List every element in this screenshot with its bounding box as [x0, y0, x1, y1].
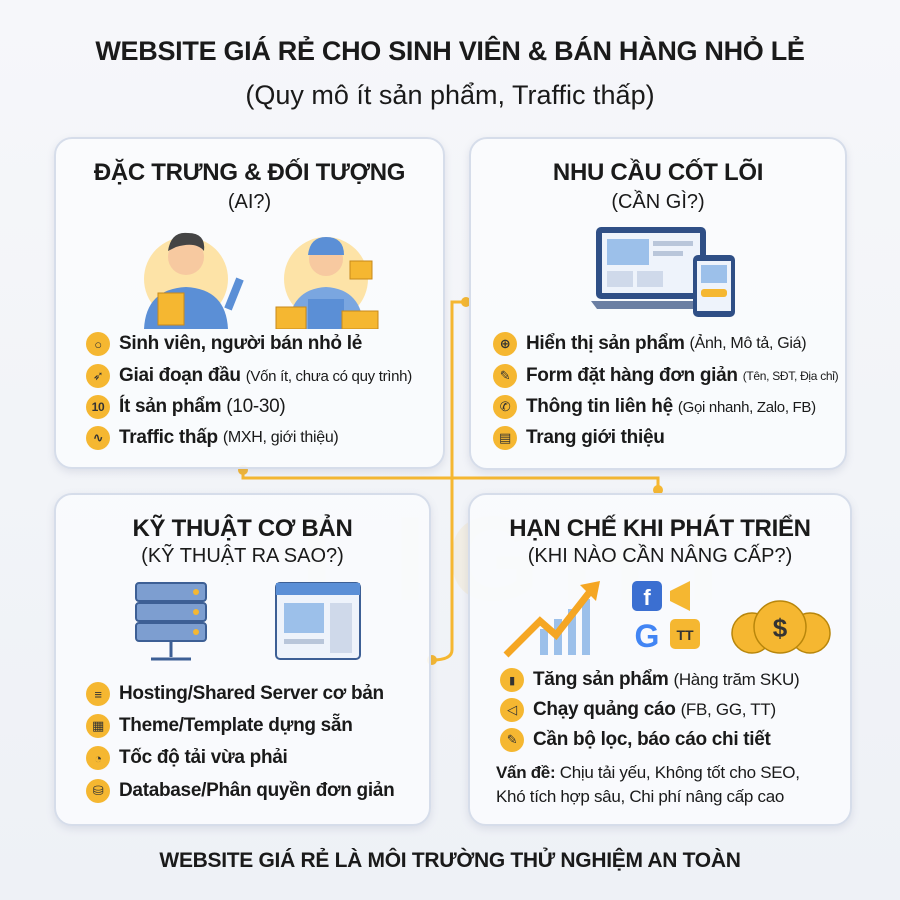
illustration: server & template — [135, 582, 361, 660]
panel: kỹ thuật: Theme/Template dựng sẵn — [119, 715, 352, 736]
panel: nhu cầu — [469, 137, 847, 470]
watermark: LIGHT — [300, 492, 760, 626]
panel: hạn chế: Chạy quảng cáo — [533, 699, 676, 720]
list: ▮ — [509, 674, 515, 686]
illustration: growth, ads, money: $ — [773, 613, 788, 643]
illustration: growth, ads, money — [504, 581, 831, 658]
list: ⊕ — [500, 336, 510, 351]
panel: hạn chế: Cần bộ lọc, báo cáo chi tiết — [533, 729, 771, 750]
subheading: (KHI NÀO CẦN NÂNG CẤP?) — [528, 545, 792, 567]
list: Tăng sản phẩm — [533, 669, 668, 690]
panel: hạn chế: ✎ — [507, 732, 517, 747]
panel: kỹ thuật: Database/Phân quyền đơn giản — [119, 780, 394, 801]
panel: kỹ thuật: ⛁ — [93, 783, 103, 798]
problem text: Vấn đề: Chịu tải yếu, Không tốt cho SEO, — [496, 763, 800, 782]
illustration: devices — [591, 227, 735, 317]
heading: NHU CẦU CỐT LÕI — [553, 159, 763, 186]
panel: nhu cầu: (Gọi nhanh, Zalo, FB) — [678, 398, 816, 416]
panel: đặc trưng: (10-30) — [226, 396, 285, 417]
panel: nhu cầu: ✆ — [500, 399, 510, 414]
footer: WEBSITE GIÁ RẺ LÀ MÔI TRƯỜNG THỬ NGHIỆM AN TOÀN — [159, 849, 741, 872]
panel: nhu cầu: ✎ — [500, 368, 510, 383]
panel: đặc trưng — [54, 137, 445, 469]
problem text: Khó tích hợp sâu, Chi phí nâng cấp cao — [496, 787, 784, 806]
list: Hiển thị sản phẩm — [526, 333, 685, 354]
panel: đặc trưng: (Vốn ít, chưa có quy trình) — [246, 368, 412, 384]
title: WEBSITE GIÁ RẺ CHO SINH VIÊN & BÁN HÀNG NHỎ LẺ — [95, 36, 805, 66]
panel: đặc trưng: 10 — [92, 400, 104, 414]
list: (Ảnh, Mô tả, Giá) — [690, 335, 806, 352]
list: Sinh viên, người bán nhỏ lẻ — [119, 333, 362, 354]
list — [500, 668, 799, 692]
panel: hạn chế — [468, 493, 852, 826]
list: ○ — [94, 336, 102, 352]
panel: đặc trưng: Traffic thấp — [119, 427, 218, 448]
heading: HẠN CHẾ KHI PHÁT TRIỂN — [509, 515, 811, 542]
problem text — [496, 763, 800, 806]
subheading: (KỸ THUẬT RA SAO?) — [141, 545, 344, 567]
list: Hosting/Shared Server cơ bản — [119, 683, 384, 704]
panel: đặc trưng: (MXH, giới thiệu) — [223, 429, 338, 446]
illustration: growth, ads, money: f — [643, 585, 651, 610]
panel: đặc trưng: Ít sản phẩm — [119, 396, 221, 417]
illustration: growth, ads, money: G — [635, 618, 659, 654]
panel: nhu cầu: Form đặt hàng đơn giản — [526, 365, 738, 386]
subheading: (CẦN GÌ?) — [611, 191, 705, 213]
list — [493, 332, 806, 356]
panel: kỹ thuật: Tốc độ tải vừa phải — [119, 747, 288, 768]
illustration: growth, ads, money: TT — [676, 627, 694, 643]
list: ≡ — [94, 686, 102, 702]
list: (Hàng trăm SKU) — [673, 670, 799, 689]
panel: hạn chế: ◁ — [507, 702, 517, 717]
panel: nhu cầu: ▤ — [499, 430, 511, 445]
illustration: people — [144, 232, 378, 329]
panel: đặc trưng: Giai đoạn đầu — [119, 365, 241, 386]
panel: kỹ thuật — [54, 493, 431, 826]
heading: ĐẶC TRƯNG & ĐỐI TƯỢNG — [94, 159, 405, 186]
panel: nhu cầu: Thông tin liên hệ — [526, 396, 673, 417]
panel: đặc trưng: ➶ — [93, 368, 103, 383]
panel: hạn chế: (FB, GG, TT) — [681, 700, 776, 719]
subtitle: (Quy mô ít sản phẩm, Traffic thấp) — [245, 80, 655, 110]
subheading: (AI?) — [228, 191, 271, 213]
panel: nhu cầu: Trang giới thiệu — [526, 427, 665, 448]
panel: nhu cầu: (Tên, SĐT, Địa chỉ) — [743, 369, 838, 383]
heading: KỸ THUẬT CƠ BẢN — [133, 515, 352, 542]
panel: đặc trưng: ∿ — [93, 430, 103, 445]
panel: kỹ thuật: ◔ — [94, 750, 102, 766]
panel: kỹ thuật: ▦ — [92, 718, 104, 733]
